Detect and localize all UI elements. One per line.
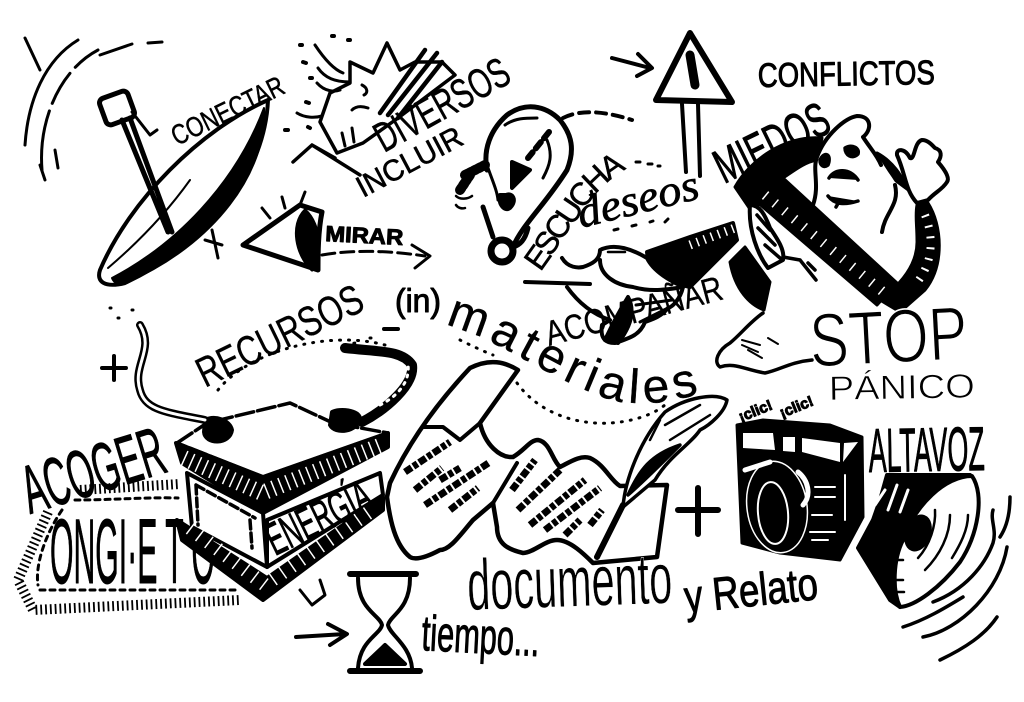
ghost foot [717, 313, 812, 373]
text: conectar: CONECTAR [166, 70, 289, 151]
icon: hands shaking [525, 223, 737, 343]
text: (in): (in) [395, 282, 441, 319]
icon: rug [18, 484, 240, 610]
text: ONGI·E T O [50, 501, 215, 603]
text: documento: documento [466, 539, 673, 626]
text: conflictos: CONFLICTOS [757, 54, 935, 95]
text: plus [678, 488, 718, 534]
ghost hand [897, 140, 948, 203]
text: deseos: deseos [572, 160, 704, 238]
text: acoger: ACOGER [12, 413, 174, 528]
icon: megaphone [858, 475, 979, 607]
text: diversos: DIVERSOS [366, 48, 518, 161]
text: panico: PÁNICO [828, 367, 975, 408]
text: stop: STOP [807, 291, 970, 384]
icon: hourglass [350, 574, 420, 671]
text: y relato: y Relato [682, 557, 820, 623]
icon: light bulb [456, 107, 632, 262]
ghost lower left sleeve [730, 247, 770, 310]
text: clic clic: ¡clic! [777, 393, 816, 422]
icon: broken plate [285, 36, 455, 175]
icon: signal waves [25, 38, 162, 180]
text: acompañar: ACOMPAÑAR [541, 269, 727, 354]
icon: eye [243, 192, 322, 270]
grip hand [750, 205, 783, 268]
text: recursos: RECURSOS [188, 275, 371, 396]
arrow: mirar [322, 245, 430, 268]
ghost body [813, 116, 930, 290]
text: clic clic [736, 393, 816, 426]
text: clic clic: ¡clic! [736, 397, 775, 426]
icon: ghost stop sign [717, 116, 948, 373]
arrow: tiempo [296, 624, 347, 645]
text: energia: ENERGÍA [257, 469, 380, 565]
text: plus and minus [102, 329, 398, 380]
icon: satellite dish [98, 90, 268, 285]
text: escucha: ESCUCHA [524, 155, 627, 270]
text: materiales: materiales [448, 300, 696, 404]
text: mirar: MIRAR [325, 221, 404, 250]
decoration: dotted arcs [110, 308, 667, 423]
ghost face [820, 146, 858, 207]
icon: sound waves [903, 497, 1010, 660]
text: tiempo: tiempo... [420, 605, 541, 667]
icon: warning sign with arrow [612, 33, 732, 176]
decoration: dots after escucha [614, 162, 668, 230]
icon: camera [737, 420, 863, 560]
icon: quill [597, 396, 727, 557]
text: incluir: INCLUIR [351, 121, 469, 204]
ring right side [880, 203, 939, 312]
icon: paper scroll [387, 362, 667, 563]
ghost outline [813, 116, 896, 232]
diagonal bar [743, 178, 897, 305]
ring arc back [735, 138, 822, 212]
text: miedos: MIEDOS [706, 93, 838, 194]
icon: battery [138, 325, 412, 605]
